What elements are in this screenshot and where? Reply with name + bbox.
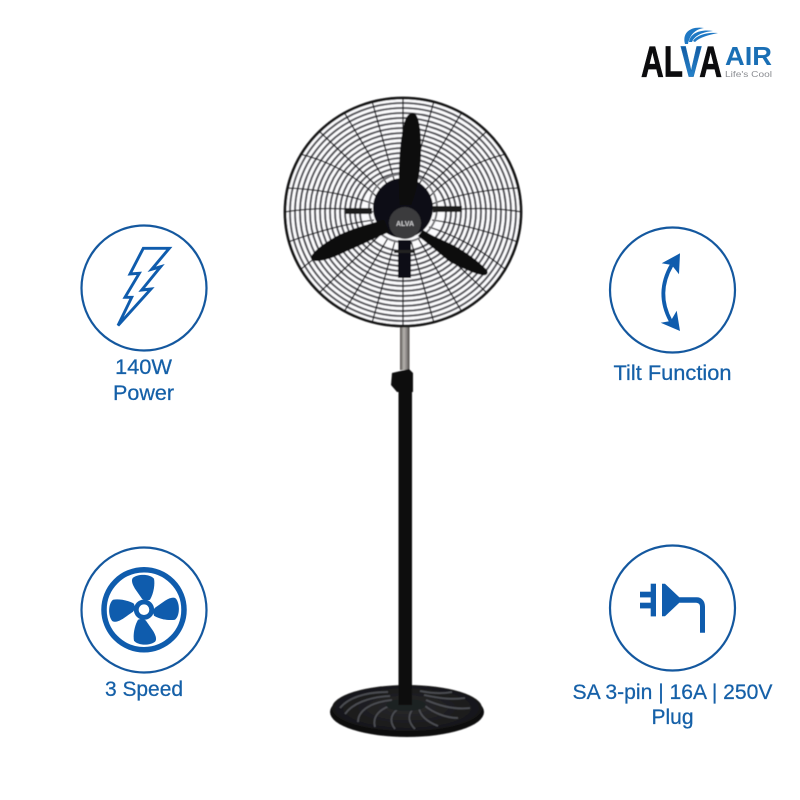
label: 140W Power: Power (113, 382, 174, 405)
label: Tilt Function: Tilt Function (614, 362, 732, 385)
chrome upper pole (400, 325, 410, 370)
icon: curved double arrow (610, 228, 735, 352)
label: SA 3-pin plug: Plug (652, 706, 694, 729)
lower pole (398, 380, 412, 705)
feature: 3 speed (82, 548, 206, 701)
logo tagline: Life's Cool (725, 69, 772, 79)
hub cap: ALVA (396, 221, 414, 228)
icon: lightning bolt (82, 226, 206, 350)
fan grille (284, 97, 522, 327)
height collar (391, 369, 413, 392)
label: 3 Speed: 3 Speed (105, 678, 183, 701)
label: 140W Power: 140W (115, 356, 172, 379)
logo wordmark AIR: AIR (725, 43, 772, 71)
fan blades (311, 113, 488, 275)
icon: fan (82, 548, 206, 672)
product: stand fan (284, 97, 522, 737)
icon: plug (610, 546, 735, 670)
fan base (330, 685, 484, 737)
feature: tilt function (610, 228, 735, 385)
logo wordmark ALVA: ALVA (641, 38, 722, 86)
hub cap (389, 207, 421, 239)
feature: 140W power (82, 226, 206, 405)
label: SA 3-pin plug: SA 3-pin | 16A | 250V (572, 681, 772, 704)
feature: SA plug (572, 546, 772, 729)
motor housing (345, 174, 462, 278)
logo: Alva Air (641, 28, 772, 86)
logo swoosh (684, 28, 718, 44)
